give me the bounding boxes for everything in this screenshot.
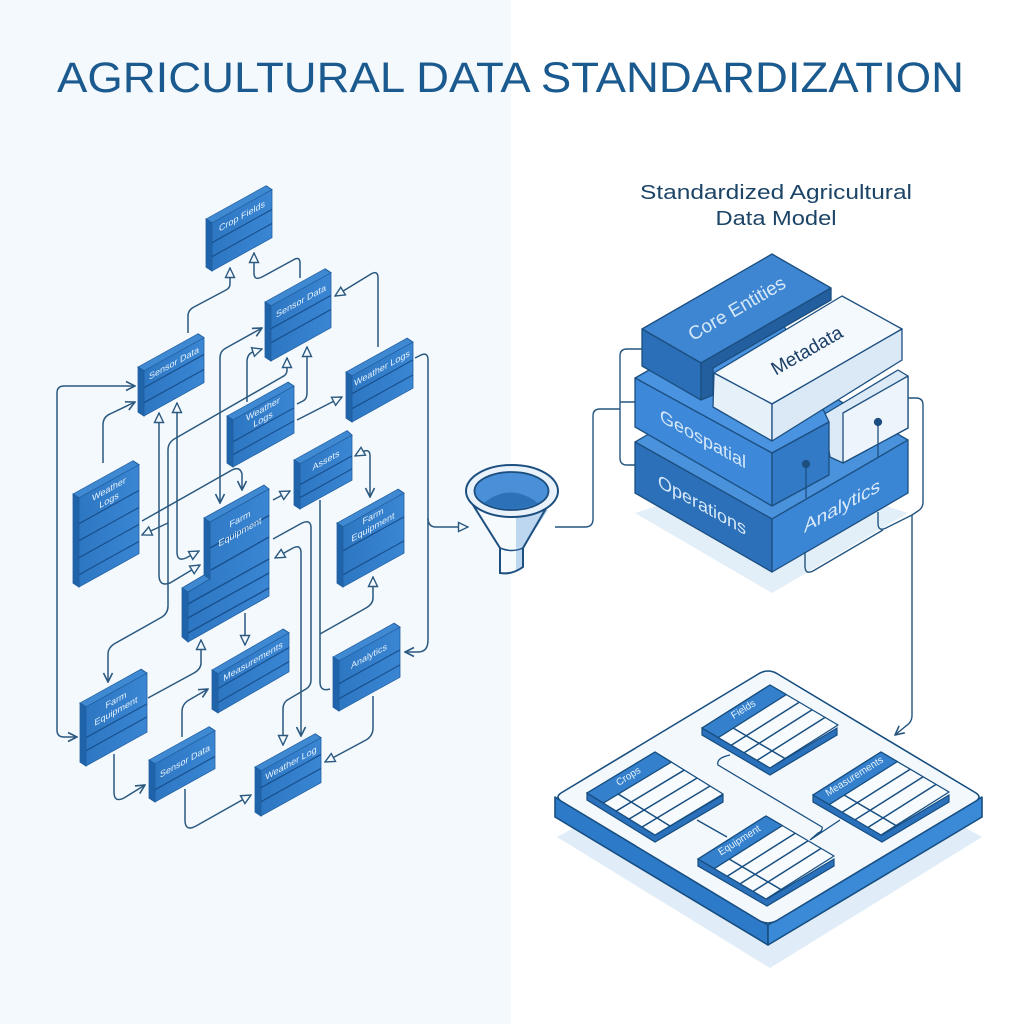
table: Crops: Crops [614,765,643,789]
heading: standardized model: Standardized Agricultural [640,182,912,204]
card: Measurements [212,626,289,716]
card: Farm Equipment right [337,486,404,590]
card: Crop Fields: Crop Fields [219,199,265,235]
card: Weather Logs centre: Weather [246,395,281,424]
panel: right background [511,0,1024,1024]
table: Equipment: Equipment [716,823,763,858]
block: Metadata [713,296,902,441]
card: Farm Equipment right: Equipment [352,511,395,545]
table: Measurements: Measurements [824,755,886,799]
card: Weather Logs left tall: Weather [92,475,127,504]
card: Sensor Data left [138,330,204,419]
card: Weather Logs right: Weather Logs [354,348,410,389]
table: Measurements [813,752,949,842]
title: AGRICULTURAL DATA STANDARDIZATION [57,54,964,102]
arrows: source connectors [57,253,468,828]
layer: Geospatial [635,300,829,506]
table: Crops [587,752,723,842]
card: Weather Log lower [255,730,321,819]
card: Assets small: Assets [313,448,340,474]
layer: Operations and Analytics [635,362,908,572]
table: Equipment [698,816,834,906]
card: Weather Logs centre [227,379,294,470]
icon: funnel [466,465,558,573]
card: Weather Log lower: Weather Log [265,744,317,783]
heading: standardized model: Data Model [716,208,836,230]
table: Fields [702,685,838,775]
layer: Geospatial: Geospatial [660,406,746,473]
block: Core Entities [642,254,831,400]
card: Sensor Data upper: Sensor Data [276,282,327,321]
arrow: stack to platform [805,398,923,735]
card: Weather Logs left tall [73,457,139,590]
card: Sensor Data left: Sensor Data [149,344,200,383]
heading: standardized model [640,182,912,230]
connector: layer dots [802,418,882,498]
card: Measurements: Measurements [223,640,283,684]
shadow: stack [635,470,908,593]
card: Farm Equipment lower left: Farm [106,690,126,712]
card: Farm Equipment large notched: Equipment [219,515,262,550]
arrow: funnel output to stack [555,349,642,527]
panel: data platform [555,671,982,968]
shadow: platform [557,720,982,968]
card: Sensor Data lower: Sensor Data [160,742,211,781]
card: Analytics [333,620,400,714]
platform slab [555,671,982,945]
card: Farm Equipment large notched: Farm [230,509,250,531]
block: Core Entities: Core Entities [685,273,790,346]
card: Weather Logs centre: Logs [253,409,273,430]
card: Analytics: Analytics [351,642,387,672]
layer: right white slab [823,370,908,463]
panel: standardized data model stack [635,254,908,593]
table: Fields: Fields [729,698,758,722]
card: Weather Logs right [346,335,413,425]
card: Crop Fields [206,182,272,274]
card: Farm Equipment right: Farm [363,506,383,528]
card: Farm Equipment large notched [182,485,269,642]
panel: left background [0,0,511,1024]
card: Sensor Data lower [149,723,215,805]
card: Weather Logs left tall: Logs [99,490,119,511]
connectors: platform relations [697,755,840,840]
card: Farm Equipment lower left [80,666,147,769]
block: Metadata: Metadata [768,322,847,380]
card: Assets small [294,428,352,512]
layer: Operations and Analytics: Analytics [804,475,880,538]
panel: messy source tables diagram [57,182,468,828]
card: Farm Equipment lower left: Equipment [95,695,138,729]
card: Sensor Data upper [265,265,331,364]
layer: Operations and Analytics: Operations [658,472,746,540]
